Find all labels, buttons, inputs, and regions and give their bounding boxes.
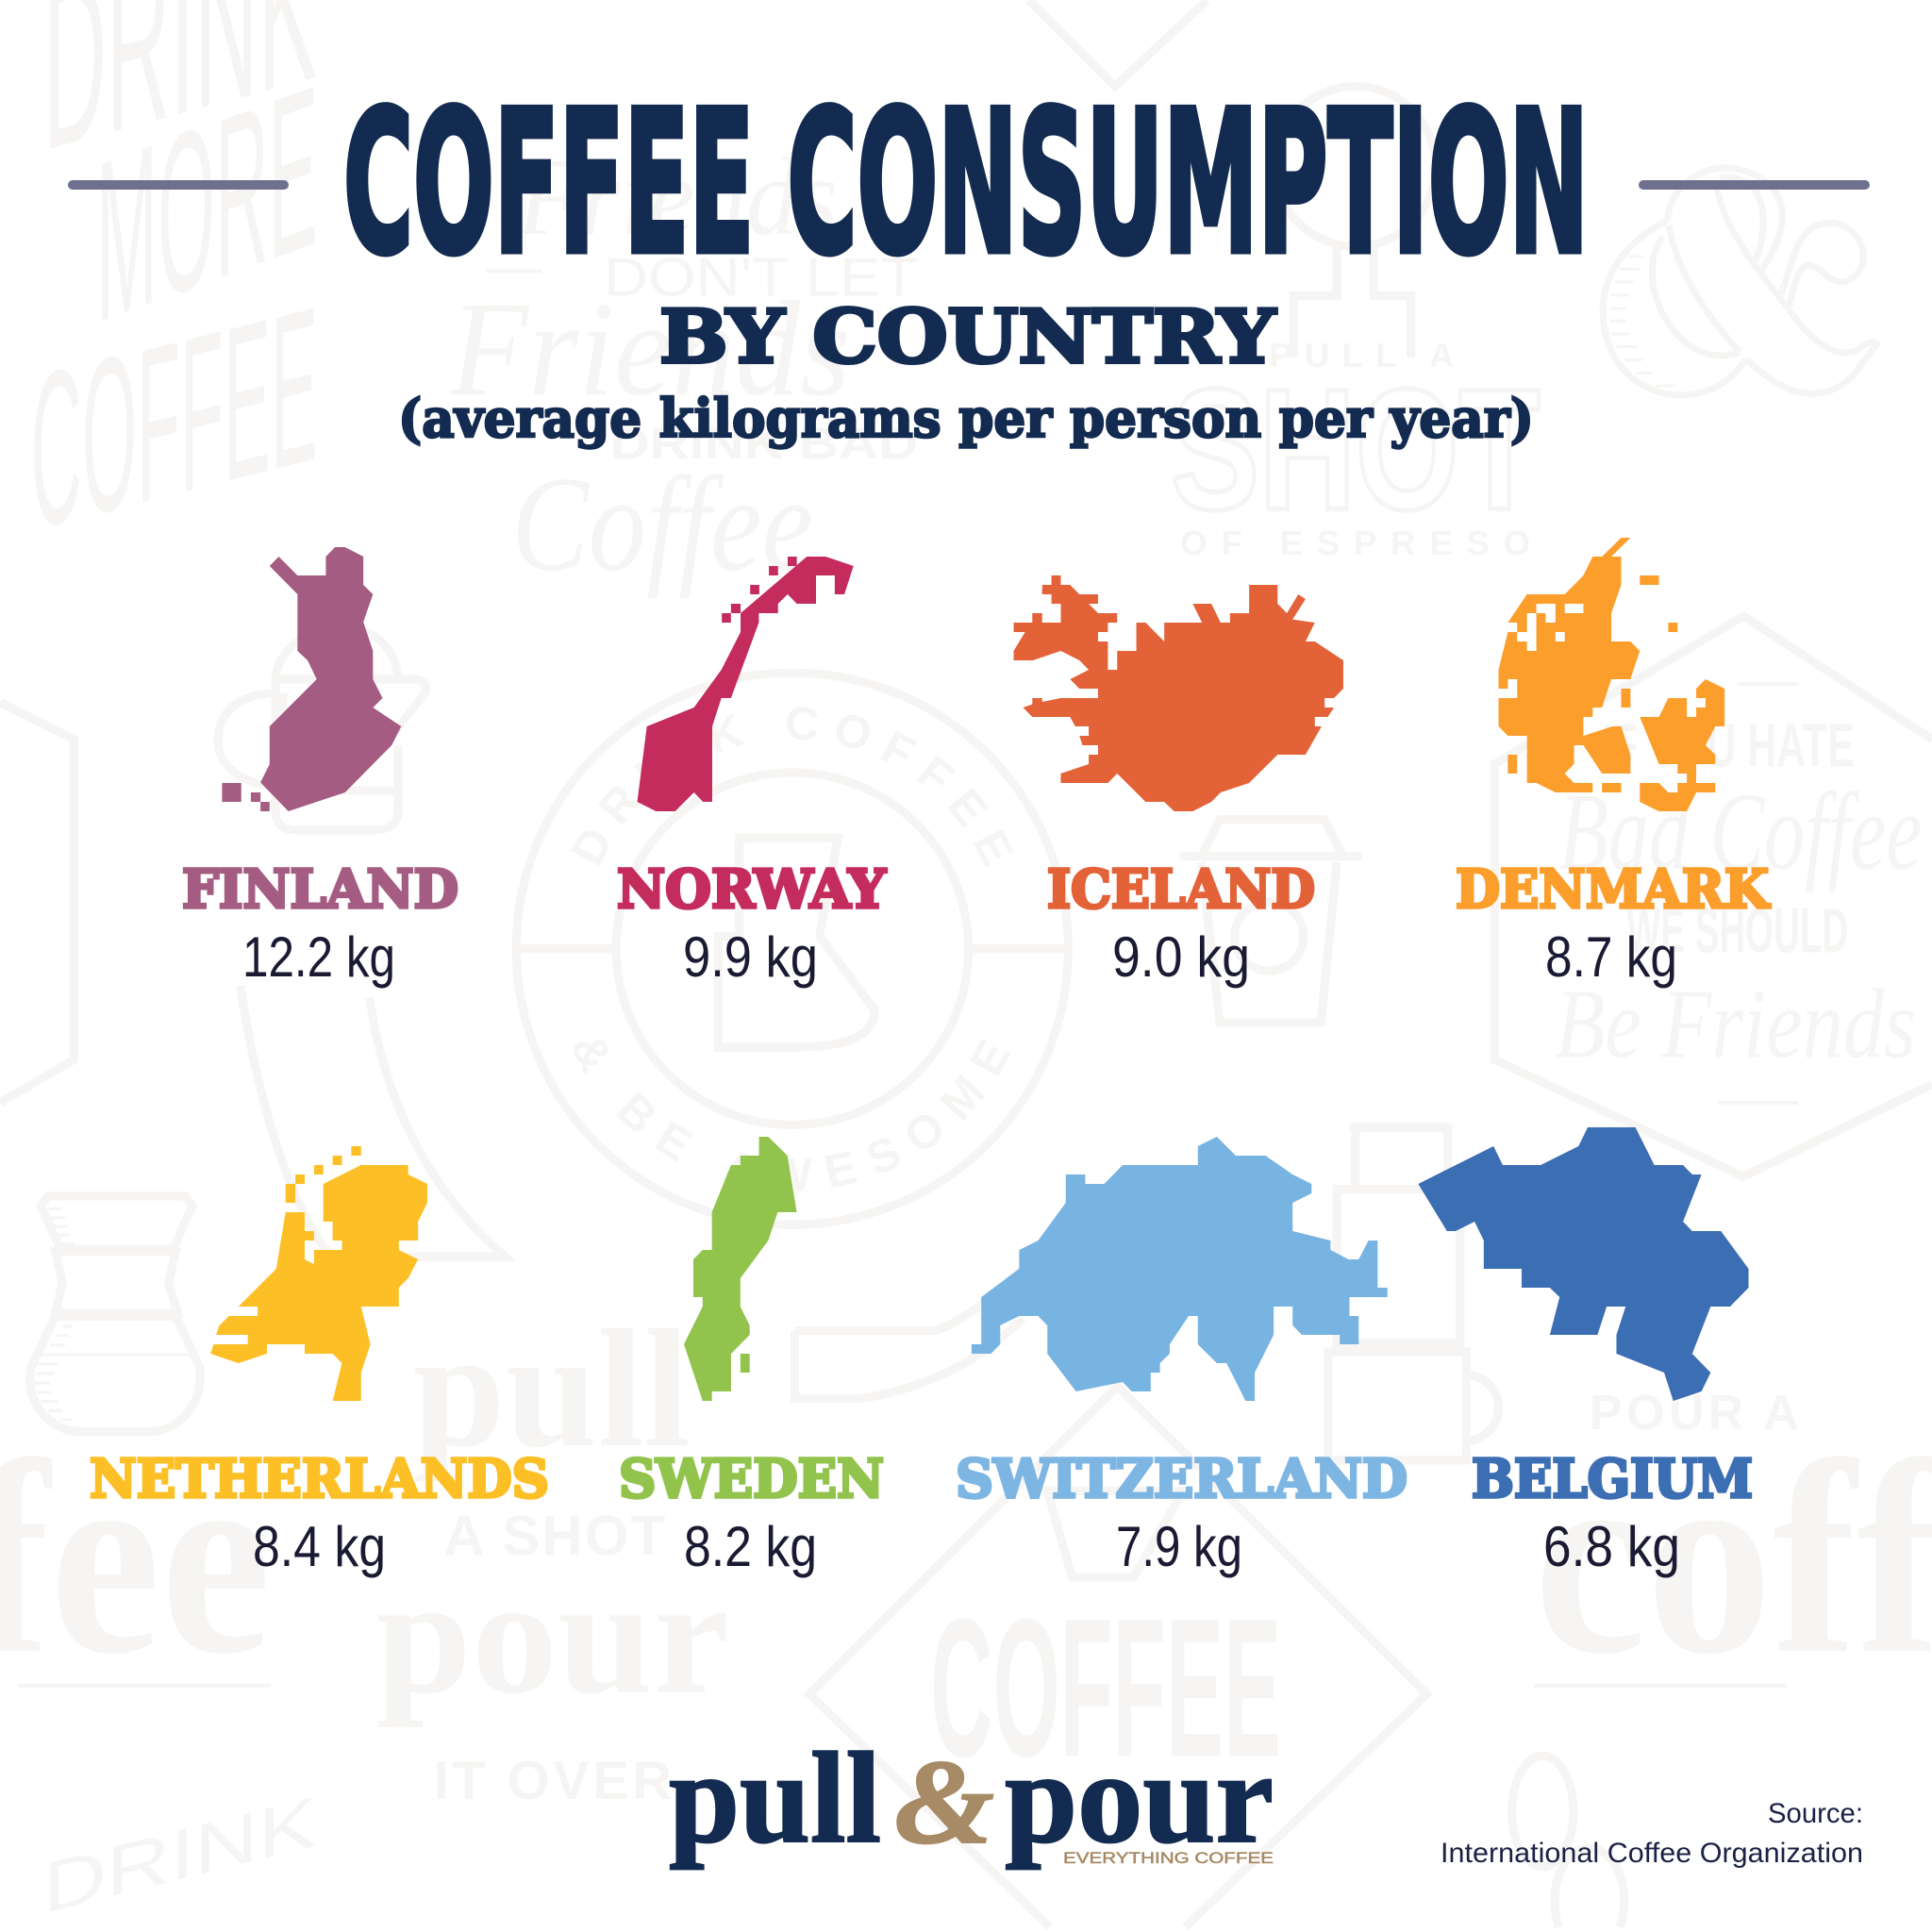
map: Netherlands: [210, 1146, 427, 1401]
background watermark pattern: SHOT: [1171, 352, 1541, 545]
title rule left: [68, 180, 289, 190]
map: Switzerland: [972, 1137, 1388, 1401]
map: Norway: [637, 557, 854, 811]
background watermark pattern: Friends: [517, 136, 838, 258]
label: Sweden: SWEDEN: [619, 1448, 884, 1510]
background watermark pattern: OF ESPRESO: [1180, 524, 1530, 562]
map: Sweden: [684, 1137, 797, 1401]
background watermark pattern: DRINK BAD: [610, 418, 918, 468]
label: Norway: NORWAY: [617, 858, 887, 921]
value: Netherlands: 8.4 kg: [253, 1515, 386, 1578]
source note: [1441, 1798, 1863, 1869]
value: Sweden: 8.2 kg: [684, 1515, 817, 1578]
background watermark pattern: PULL A: [1269, 336, 1454, 375]
value: Finland: 12.2 kg: [242, 925, 395, 989]
background watermark pattern: IT OVER: [434, 1751, 672, 1811]
background watermark pattern: DRINK: [43, 1781, 317, 1929]
label: Finland: FINLAND: [182, 858, 458, 921]
background watermark pattern: Friends: [449, 275, 850, 425]
background watermark pattern: COFFEE: [930, 1578, 1281, 1798]
logo: pull & pour: pour: [1005, 1725, 1274, 1870]
background watermark pattern: & BE AWESOME: [574, 1039, 1010, 1191]
background watermark pattern: DRINK COFFEE: [572, 708, 1013, 867]
label: Netherlands: NETHERLANDS: [90, 1448, 549, 1510]
source note: Source:: [1768, 1798, 1863, 1829]
background watermark pattern: Coffee: [511, 449, 813, 599]
map: Finland: [222, 547, 401, 811]
source note: International Coffee Organization: [1441, 1838, 1863, 1869]
map: Iceland: [1014, 575, 1343, 811]
background watermark pattern: DON'T LET: [604, 247, 918, 308]
map: Denmark: [1498, 538, 1724, 811]
label: Switzerland: SWITZERLAND: [956, 1448, 1407, 1510]
background watermark pattern: A SHOT: [443, 1504, 666, 1567]
label: Iceland: ICELAND: [1047, 858, 1315, 921]
background watermark pattern: pull: [413, 1295, 690, 1482]
logo: pull & pour: pull: [669, 1725, 881, 1870]
logo: pull & pour: [669, 1725, 1274, 1870]
background watermark pattern: pour: [375, 1544, 729, 1728]
background watermark pattern: POUR A: [1590, 1386, 1799, 1441]
map: Belgium: [1418, 1127, 1749, 1401]
value: Norway: 9.9 kg: [683, 925, 818, 989]
panel: Belgium: [1418, 1127, 1753, 1578]
panel: Iceland: [1014, 575, 1343, 989]
value: Iceland: 9.0 kg: [1112, 925, 1250, 989]
subtitle: by country: BY COUNTRY: [659, 294, 1276, 380]
label: Belgium: BELGIUM: [1472, 1448, 1753, 1510]
panel: Switzerland: [956, 1137, 1407, 1578]
logo: pull & pour: &: [894, 1735, 994, 1869]
value: Belgium: 6.8 kg: [1543, 1515, 1680, 1578]
value: Denmark: 8.7 kg: [1545, 925, 1677, 989]
panel: Norway: [617, 557, 887, 989]
background watermark pattern: COFFEE: [31, 260, 318, 577]
label: Denmark: DENMARK: [1456, 858, 1771, 921]
subtitle: unit note: (average kilograms per person per year): [398, 388, 1534, 450]
panel: Sweden: [619, 1137, 884, 1578]
panel: Denmark: [1456, 538, 1771, 989]
panel: Netherlands: [90, 1146, 549, 1578]
title rule right: [1639, 180, 1870, 190]
logo: pull & pour: EVERYTHING COFFEE: [1063, 1849, 1274, 1867]
value: Switzerland: 7.9 kg: [1116, 1515, 1242, 1578]
panel: Finland: [182, 547, 458, 989]
